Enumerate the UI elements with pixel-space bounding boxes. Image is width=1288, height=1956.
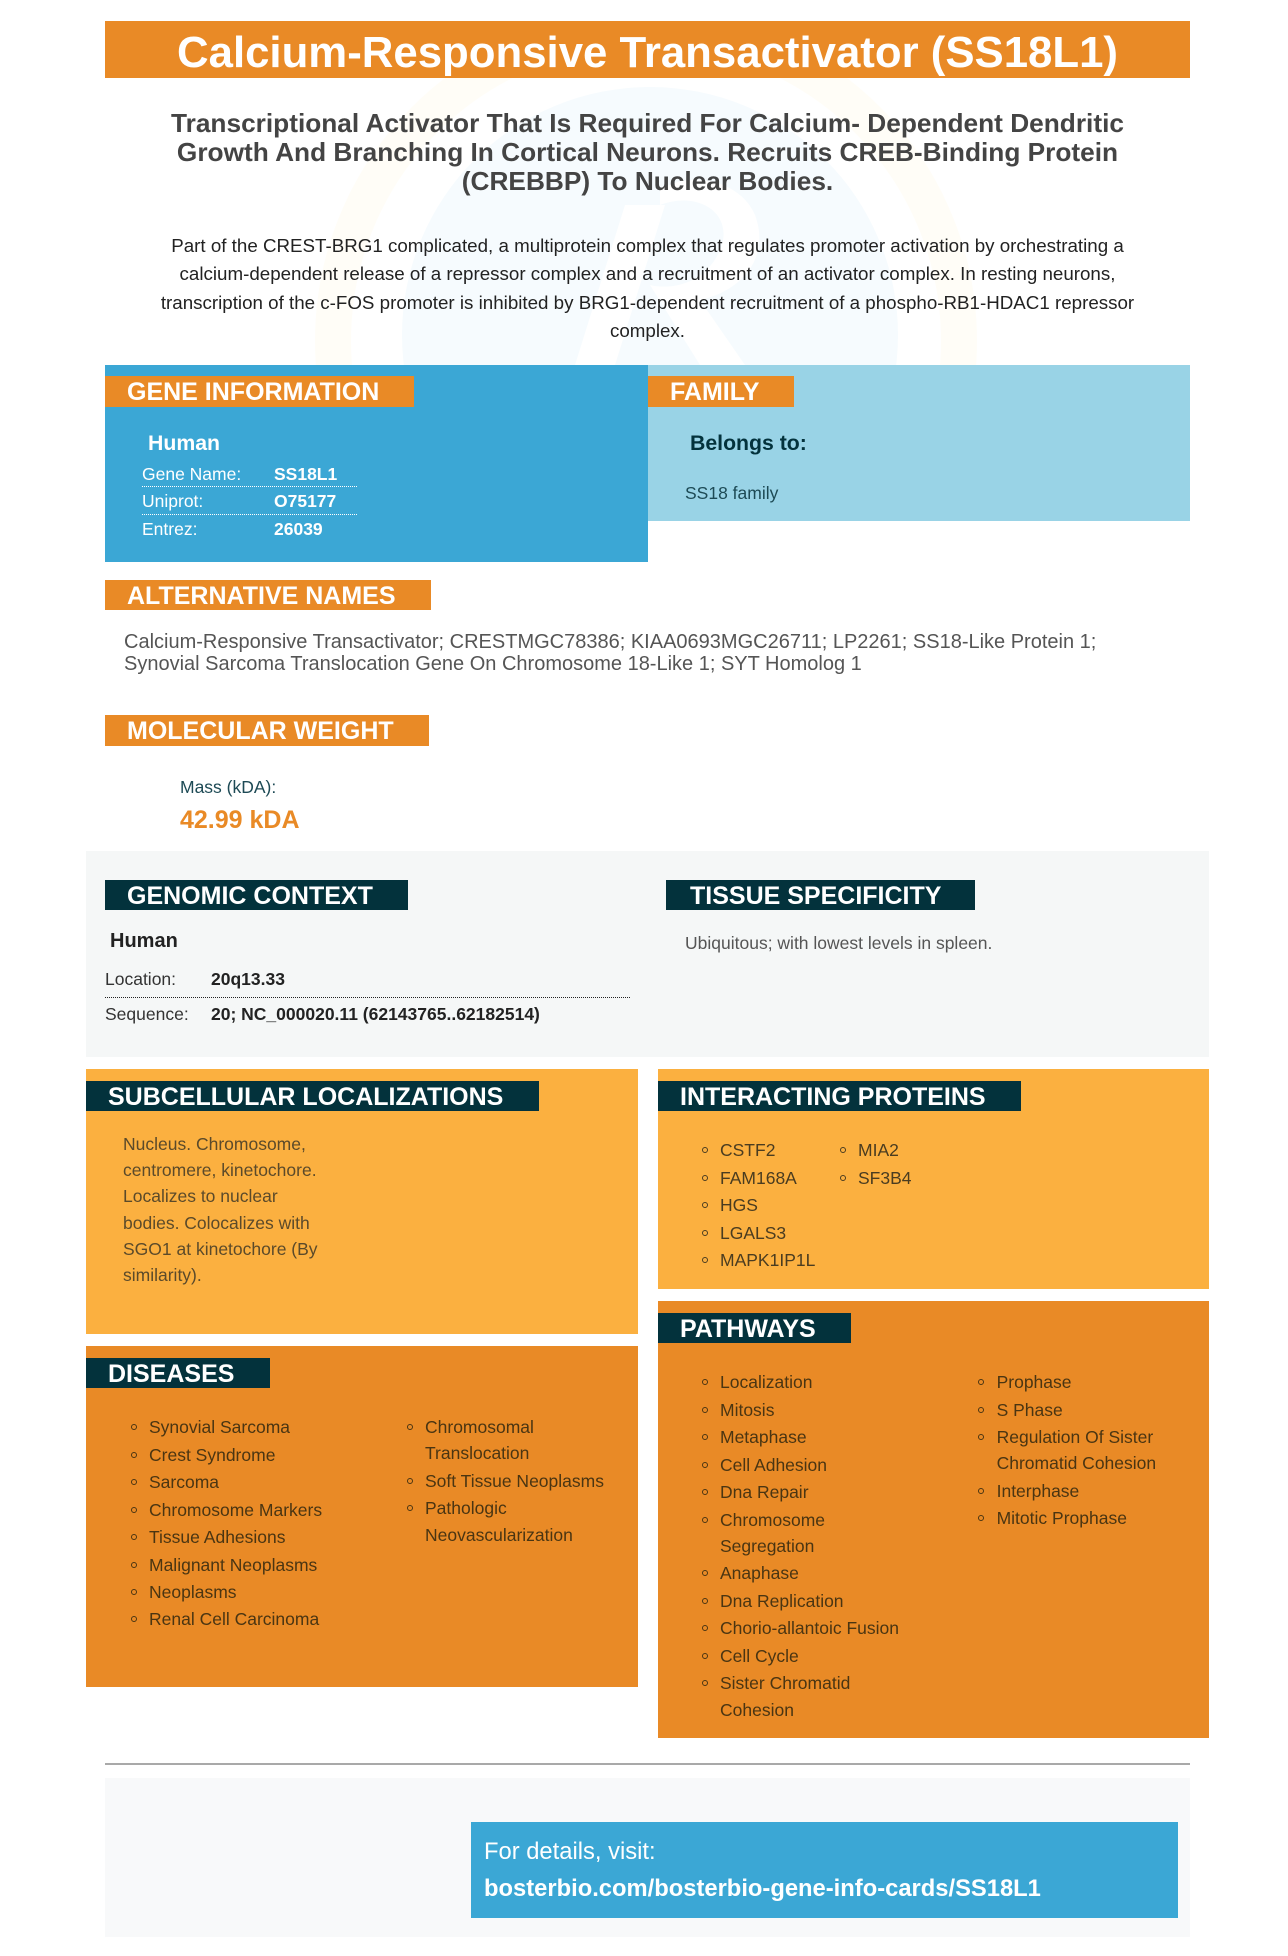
localization text: SGO1 at kinetochore (By xyxy=(123,1239,318,1259)
heading: diseases: DISEASES xyxy=(108,1360,234,1388)
panel: footer xyxy=(105,1778,1190,1937)
panel: family xyxy=(648,365,1190,521)
gene name row: Gene Name: xyxy=(142,464,241,484)
localization text: Nucleus. Chromosome, xyxy=(123,1134,306,1154)
disease list: Neoplasms xyxy=(149,1582,237,1602)
mass label: Mass (kDA): xyxy=(180,777,276,797)
description: transcription of the c-FOS promoter is inhibited by BRG1-dependent recruitment of a phospho-RB1-HDAC1 repressor xyxy=(161,292,1134,313)
panel: genomic context and tissue specificity xyxy=(86,851,1209,1057)
disease list: Chromosomal xyxy=(425,1417,534,1437)
heading: interacting proteins: INTERACTING PROTEINS xyxy=(680,1083,986,1111)
localization text: Localizes to nuclear xyxy=(123,1186,278,1206)
subtitle: Transcriptional Activator That Is Required For Calcium- Dependent Dendritic xyxy=(171,108,1124,138)
pathway list: Dna Replication xyxy=(720,1591,844,1611)
disease list: Renal Cell Carcinoma xyxy=(149,1609,319,1629)
sequence row: Sequence: xyxy=(105,1004,189,1024)
description: Part of the CREST-BRG1 complicated, a multiprotein complex that regulates promoter activation by orchestrating a xyxy=(171,235,1124,256)
pathway list: Dna Repair xyxy=(720,1482,809,1502)
heading: genomic context: GENOMIC CONTEXT xyxy=(127,882,373,910)
localization text: centromere, kinetochore. xyxy=(123,1160,317,1180)
panel: pathways xyxy=(658,1301,1209,1738)
protein list: MAPK1IP1L xyxy=(720,1250,815,1270)
uniprot row: Uniprot: xyxy=(142,491,203,511)
disease list: Soft Tissue Neoplasms xyxy=(425,1471,604,1491)
subtitle: (CREBBP) To Nuclear Bodies. xyxy=(462,166,833,196)
pathway list: Prophase xyxy=(997,1372,1072,1392)
heading: molecular weight: MOLECULAR WEIGHT xyxy=(127,717,394,745)
pathway list: Interphase xyxy=(997,1481,1079,1501)
description xyxy=(161,235,1134,341)
description: calcium-dependent release of a repressor complex and a recruitment of an activator complex. In resting neurons, xyxy=(180,263,1115,284)
uniprot row: O75177 xyxy=(274,491,336,511)
mass value: 42.99 kDA xyxy=(180,806,300,834)
pathway list: Chromosome xyxy=(720,1510,825,1530)
heading: family: FAMILY xyxy=(670,378,759,406)
tissue specificity text: Ubiquitous; with lowest levels in spleen. xyxy=(685,933,992,953)
alternative names text xyxy=(124,631,1096,675)
pathway list: Cell Adhesion xyxy=(720,1455,827,1475)
heading: family xyxy=(648,376,794,407)
location row: 20q13.33 xyxy=(211,969,285,989)
belongs to label: Belongs to: xyxy=(690,431,807,455)
disease list: Crest Syndrome xyxy=(149,1445,275,1465)
sequence row: 20; NC_000020.11 (62143765..62182514) xyxy=(211,1004,540,1024)
protein list: SF3B4 xyxy=(858,1168,912,1188)
species label: Human xyxy=(110,930,178,952)
pathway list: Chorio-allantoic Fusion xyxy=(720,1618,899,1638)
pathway list: Cohesion xyxy=(720,1700,794,1720)
heading: alternative names: ALTERNATIVE NAMES xyxy=(127,582,396,610)
description: complex. xyxy=(610,320,685,341)
protein list: CSTF2 xyxy=(720,1140,775,1160)
panel: subcellular localizations xyxy=(86,1069,638,1334)
gene name row xyxy=(142,459,357,487)
location row: Location: xyxy=(105,969,176,989)
pathway list: Mitotic Prophase xyxy=(997,1508,1127,1528)
pathway list: Anaphase xyxy=(720,1563,799,1583)
disease list: Malignant Neoplasms xyxy=(149,1555,317,1575)
disease list: Neovascularization xyxy=(425,1525,573,1545)
pathway list: Sister Chromatid xyxy=(720,1673,850,1693)
localization text: bodies. Colocalizes with xyxy=(123,1213,310,1233)
disease list: Tissue Adhesions xyxy=(149,1527,286,1547)
heading: pathways: PATHWAYS xyxy=(680,1315,816,1343)
gene name row: SS18L1 xyxy=(274,464,337,484)
entrez row xyxy=(142,519,323,539)
pathway list: Metaphase xyxy=(720,1427,807,1447)
disease list: Sarcoma xyxy=(149,1472,219,1492)
entrez row: 26039 xyxy=(274,519,323,539)
disease list: Chromosome Markers xyxy=(149,1500,322,1520)
protein list: LGALS3 xyxy=(720,1223,786,1243)
callout: details link xyxy=(471,1822,1178,1918)
panel: diseases xyxy=(86,1346,638,1687)
pathway list: Localization xyxy=(720,1372,812,1392)
subtitle: Growth And Branching In Cortical Neurons. Recruits CREB-Binding Protein xyxy=(177,137,1118,167)
family value: SS18 family xyxy=(685,483,778,503)
pathway list: Mitosis xyxy=(720,1400,774,1420)
heading: pathways xyxy=(658,1313,851,1343)
localization text: similarity). xyxy=(123,1265,202,1285)
alternative names text: Calcium-Responsive Transactivator; CRESTMGC78386; KIAA0693MGC26711; LP2261; SS18-Like Protein 1; xyxy=(124,631,1096,653)
localization text xyxy=(123,1134,318,1285)
protein list: FAM168A xyxy=(720,1168,797,1188)
disease list: Pathologic xyxy=(425,1498,507,1518)
alternative names text: Synovial Sarcoma Translocation Gene On Chromosome 18-Like 1; SYT Homolog 1 xyxy=(124,653,862,675)
location row xyxy=(105,964,630,998)
details label: For details, visit: xyxy=(484,1838,656,1865)
pathway list: Regulation Of Sister xyxy=(997,1427,1153,1447)
panel: alternative names xyxy=(105,580,1096,675)
pathway list: Chromatid Cohesion xyxy=(997,1453,1156,1473)
details url: bosterbio.com/bosterbio-gene-info-cards/SS18L1 xyxy=(484,1875,1041,1902)
protein list xyxy=(702,1140,912,1270)
panel: gene information xyxy=(105,365,648,562)
subtitle xyxy=(171,108,1124,196)
heading: tissue specificity: TISSUE SPECIFICITY xyxy=(690,882,941,910)
disease list: Translocation xyxy=(425,1443,529,1463)
species label: Human xyxy=(148,431,220,455)
disease list xyxy=(131,1417,604,1629)
heading: subcellular localizations: SUBCELLULAR LOCALIZATIONS xyxy=(108,1083,503,1111)
title: Calcium-Responsive Transactivator (SS18L1) xyxy=(177,28,1118,77)
heading: diseases xyxy=(86,1358,270,1388)
pathway list: S Phase xyxy=(997,1400,1063,1420)
panel: molecular weight xyxy=(105,715,429,834)
panel: interacting proteins xyxy=(658,1069,1209,1289)
protein list: HGS xyxy=(720,1195,758,1215)
pathway list: Segregation xyxy=(720,1536,814,1556)
uniprot row xyxy=(142,486,357,515)
heading: gene information: GENE INFORMATION xyxy=(127,378,379,406)
disease list: Synovial Sarcoma xyxy=(149,1417,290,1437)
protein list: MIA2 xyxy=(858,1140,899,1160)
watermark logo xyxy=(402,87,898,365)
pathway list xyxy=(702,1372,1156,1720)
pathway list: Cell Cycle xyxy=(720,1646,799,1666)
entrez row: Entrez: xyxy=(142,519,197,539)
